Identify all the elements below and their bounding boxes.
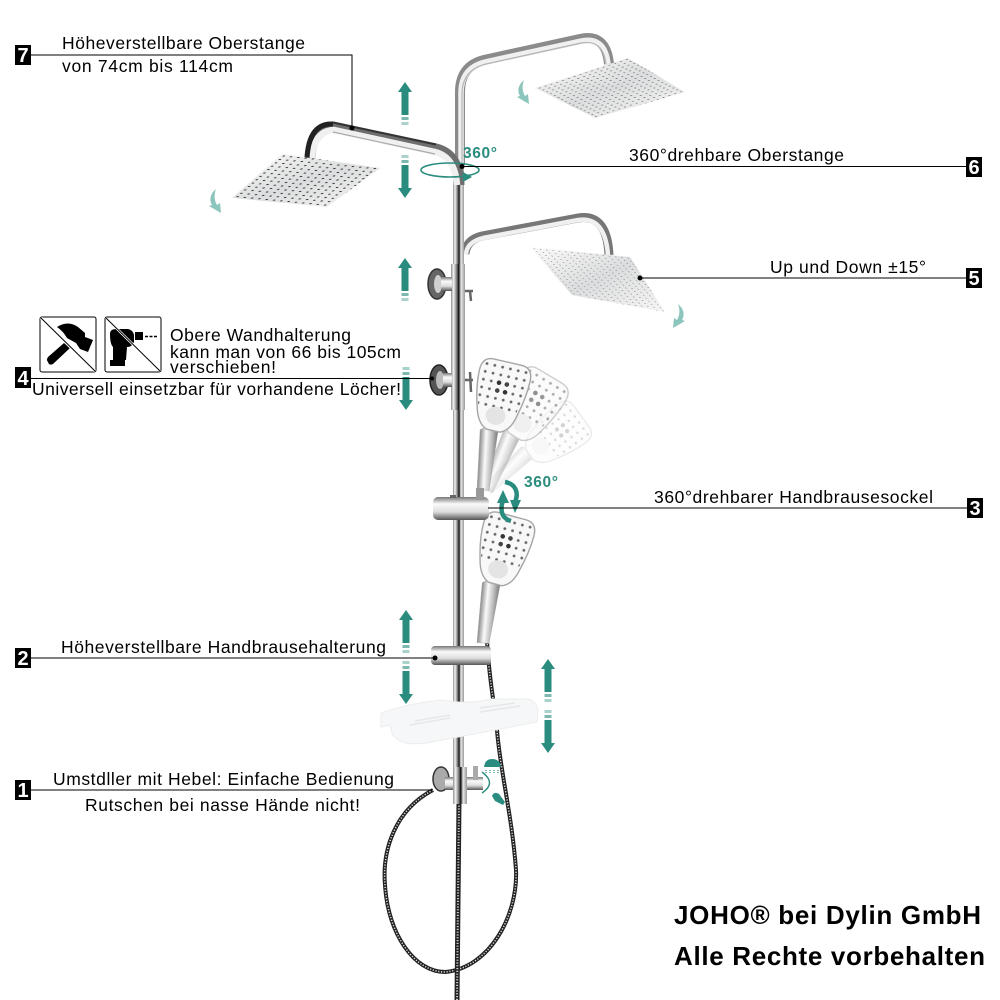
tilt arrow, top head	[517, 80, 529, 104]
callout 7: adjustable upper rod: von 74cm bis 114cm	[62, 56, 233, 76]
callout 3: hand shower socket: 3	[969, 498, 981, 520]
callout 4: wall bracket: verschieben!	[170, 357, 276, 377]
hand shower height holder	[431, 646, 491, 665]
hand shower socket clamp	[433, 488, 489, 520]
soap shelf	[381, 699, 538, 744]
main vertical rod	[453, 168, 464, 800]
tilt arrow, left head	[209, 189, 221, 213]
icon: selector arc	[482, 772, 490, 793]
360 degree label, socket: 360°	[524, 474, 558, 491]
callout 2: hand shower holder	[15, 637, 438, 670]
callout 1: diverter: Rutschen bei nasse Hände nicht!	[85, 795, 360, 815]
callout 7: adjustable upper rod: 7	[17, 45, 29, 67]
copyright note: JOHO® bei Dylin GmbH	[674, 900, 981, 930]
top shower arm, raised position	[460, 38, 609, 165]
left shower arm, lowered position	[307, 122, 459, 185]
arrow down, wall bracket	[399, 367, 413, 410]
arrow up, top arm	[398, 82, 412, 125]
tilt arrow, lower head	[673, 304, 685, 328]
hand shower, lower	[463, 508, 538, 647]
callout 4: wall bracket: kann man von 66 bis 105cm	[170, 342, 401, 362]
arrow down, shelf	[541, 710, 555, 753]
top rain shower head	[535, 58, 685, 118]
callout 5: tilt: 5	[968, 268, 980, 290]
callout 4: wall bracket: Obere Wandhalterung	[170, 325, 351, 345]
icon: no hammer	[40, 317, 96, 372]
360 degree label, top: 360°	[463, 145, 497, 162]
callout 7: adjustable upper rod: Höheverstellbare Oberstange	[62, 33, 305, 53]
callout 5: tilt: Up und Down ±15°	[770, 257, 926, 277]
copyright note	[674, 900, 985, 971]
callout 5: tilt	[638, 257, 982, 290]
callout 6: rotating upper rod	[460, 145, 982, 179]
callout 3: hand shower socket: 360°drehbarer Handbrausesockel	[654, 487, 933, 507]
diverter valve	[433, 766, 483, 804]
arrow down, top arm	[398, 155, 412, 198]
arrow up, shelf	[541, 659, 555, 702]
callout 1: diverter	[15, 769, 433, 815]
callout 4: wall bracket: Universell einsetzbar für vorhandene Löcher!	[32, 379, 401, 399]
callout 2: hand shower holder: 2	[17, 648, 29, 670]
arrow up, wall bracket	[398, 258, 412, 301]
upper wall bracket	[428, 269, 473, 301]
rotation ring around top rod	[421, 163, 479, 182]
rotation arrows at hand shower socket	[497, 482, 521, 521]
hoses	[385, 640, 516, 1000]
callout 7: adjustable upper rod	[15, 33, 354, 130]
callout 6: rotating upper rod: 360°drehbare Oberstange	[629, 145, 844, 165]
lower rain shower head	[530, 247, 665, 312]
callout 6: rotating upper rod: 6	[968, 157, 980, 179]
left rain shower head	[232, 154, 380, 207]
copyright note: Alle Rechte vorbehalten	[674, 941, 985, 971]
callout 4: wall bracket	[15, 317, 434, 399]
icon: no drill	[105, 317, 161, 372]
lower wall bracket	[430, 365, 473, 395]
rod sleeves	[451, 264, 465, 410]
lower shower arm	[465, 217, 609, 255]
arrow up, holder	[399, 610, 413, 653]
callout 2: hand shower holder: Höheverstellbare Handbrausehalterung	[61, 637, 386, 657]
callout 1: diverter: Umstdller mit Hebel: Einfache Bedienung	[53, 769, 394, 789]
shower column assembly	[232, 38, 685, 1000]
callout 1: diverter: 1	[17, 780, 29, 802]
hand shower, upper	[463, 356, 534, 492]
icon: rain shower	[484, 759, 501, 767]
diverter function icons	[482, 759, 505, 805]
icon: water dots	[486, 770, 498, 773]
arrow down, holder	[399, 661, 413, 704]
callout 4: wall bracket: 4	[17, 368, 29, 390]
teal height arrows	[398, 82, 555, 753]
callout 3: hand shower socket	[488, 487, 983, 520]
hand shower, faded rotation positions	[469, 358, 601, 518]
icon: hand shower	[492, 793, 505, 805]
